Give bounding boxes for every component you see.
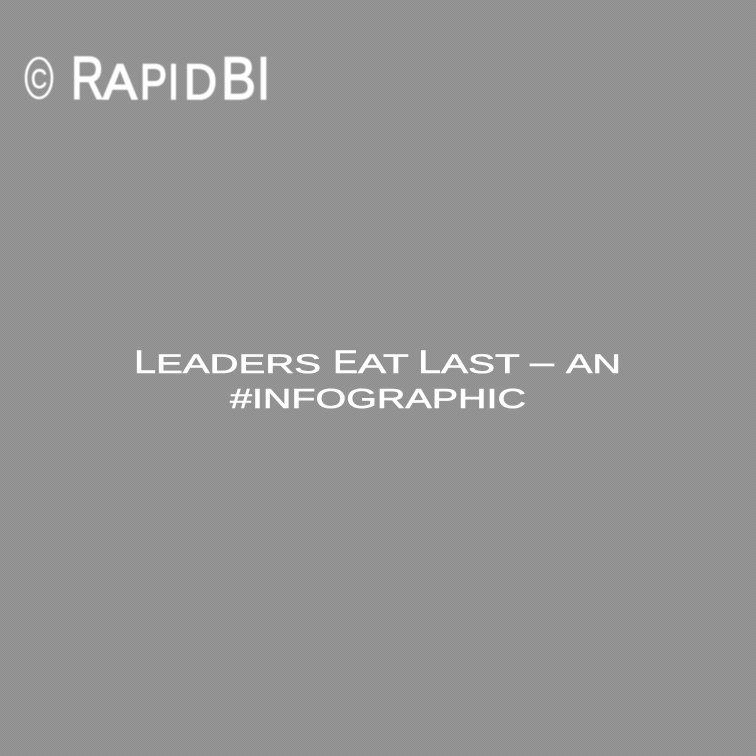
logo wordmark: B <box>221 45 256 112</box>
icon: copyright symbol <box>26 58 52 98</box>
icon: copyright symbol: C <box>31 64 47 94</box>
logo wordmark: I <box>168 54 179 110</box>
title line 1: – <box>530 344 554 380</box>
title <box>134 344 621 414</box>
title line 1: AST <box>441 349 519 379</box>
logo wordmark <box>71 45 270 112</box>
title line 1: AN <box>566 349 621 379</box>
logo wordmark: P <box>140 54 167 110</box>
logo wordmark: R <box>71 45 104 112</box>
title line 1: EADERS <box>156 349 321 379</box>
logo wordmark: A <box>103 54 138 110</box>
title line 1: L <box>134 344 156 380</box>
title line 2: #INFOGRAPHIC <box>230 383 526 414</box>
logo wordmark: I <box>257 45 270 112</box>
logo wordmark: D <box>184 54 217 110</box>
title line 1: L <box>418 344 441 380</box>
logo: RapidBI copyright mark <box>26 45 270 112</box>
title line 1: E <box>333 344 358 380</box>
title line 1: AT <box>358 349 408 379</box>
